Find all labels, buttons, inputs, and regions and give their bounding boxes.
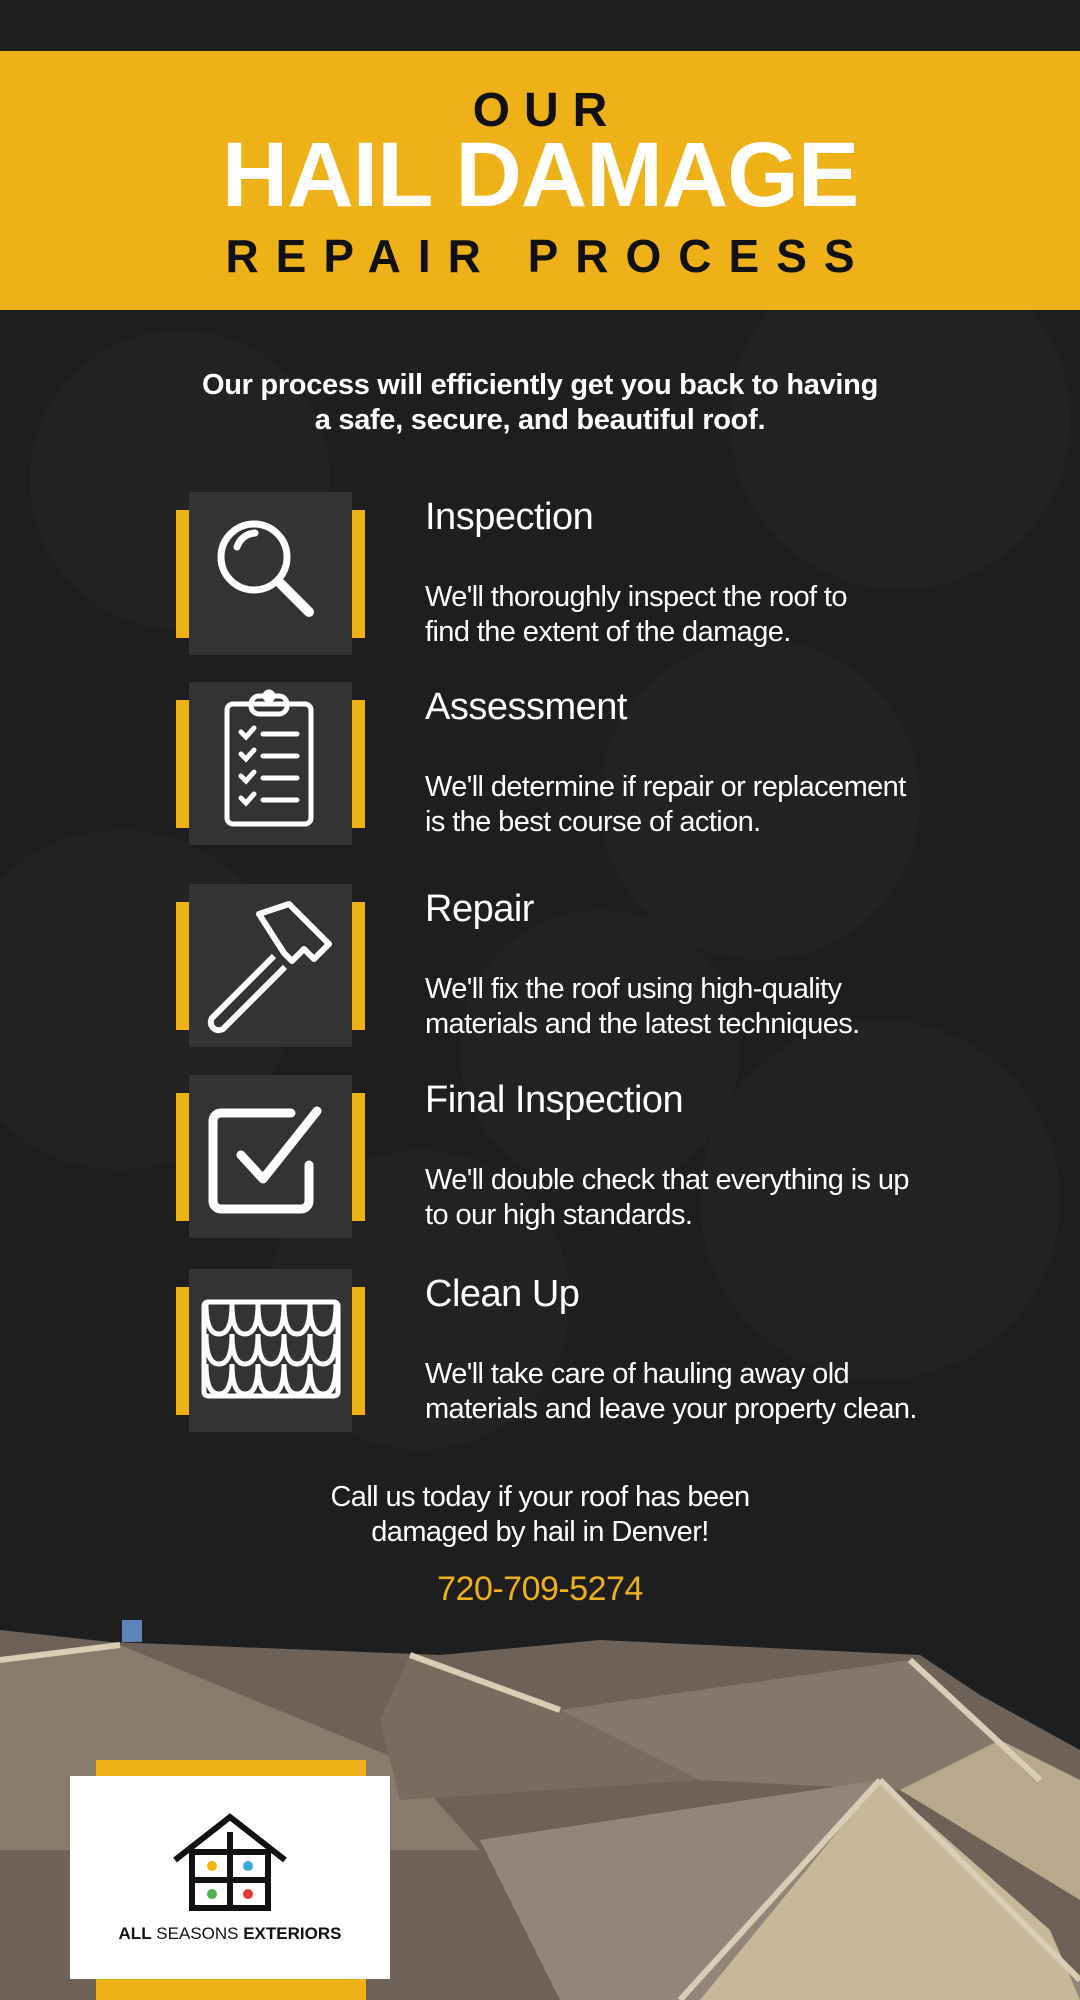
step: Inspection: Inspection: [425, 496, 593, 538]
icon: checkbox: [189, 1075, 352, 1238]
step: Repair: materials and the latest techniques.: [425, 1008, 860, 1040]
icon: shingles: [189, 1269, 352, 1432]
call to action: damaged by hail in Denver!: [371, 1516, 709, 1548]
call to action: [330, 1481, 750, 1548]
title: OUR: OUR: [473, 84, 621, 137]
step: Inspection: We'll thoroughly inspect the roof to: [425, 581, 847, 613]
step: Repair: [176, 884, 860, 1047]
intro text: a safe, secure, and beautiful roof.: [315, 404, 765, 436]
header band: [0, 51, 1080, 310]
step: Repair: Repair: [425, 888, 534, 930]
step: Inspection: [176, 492, 847, 655]
step: Final Inspection: to our high standards.: [425, 1199, 692, 1231]
logo house icon: [173, 1813, 287, 1911]
step: Clean Up: materials and leave your property clean.: [425, 1393, 917, 1425]
step: Assessment: We'll determine if repair or replacement: [425, 771, 906, 803]
call to action: Call us today if your roof has been: [330, 1481, 750, 1513]
roof photo: [0, 1620, 1080, 2000]
step: Clean Up: Clean Up: [425, 1273, 579, 1315]
step: Clean Up: We'll take care of hauling away old: [425, 1358, 849, 1390]
step: Final Inspection: Final Inspection: [425, 1079, 683, 1121]
logo text: ALL SEASONS EXTERIORS: [119, 1924, 341, 1943]
phone number: 720-709-5274: [437, 1570, 643, 1608]
step: Clean Up: [176, 1269, 917, 1432]
step: Repair: We'll fix the roof using high-quality: [425, 973, 841, 1005]
intro text: [202, 369, 878, 436]
step: Assessment: is the best course of action.: [425, 806, 761, 838]
step: Inspection: find the extent of the damage.: [425, 616, 791, 648]
title: HAIL DAMAGE: HAIL DAMAGE: [222, 124, 858, 226]
icon: magnifier: [189, 492, 352, 655]
step: Assessment: Assessment: [425, 686, 627, 728]
step: Assessment: [176, 682, 906, 845]
title: REPAIR PROCESS: REPAIR PROCESS: [225, 230, 872, 282]
logo card: [70, 1760, 390, 2000]
step: Final Inspection: We'll double check that everything is up: [425, 1164, 909, 1196]
icon: hammer: [189, 884, 352, 1047]
icon: clipboard: [189, 682, 352, 845]
intro text: Our process will efficiently get you back to having: [202, 369, 878, 401]
step: Final Inspection: [176, 1075, 909, 1238]
